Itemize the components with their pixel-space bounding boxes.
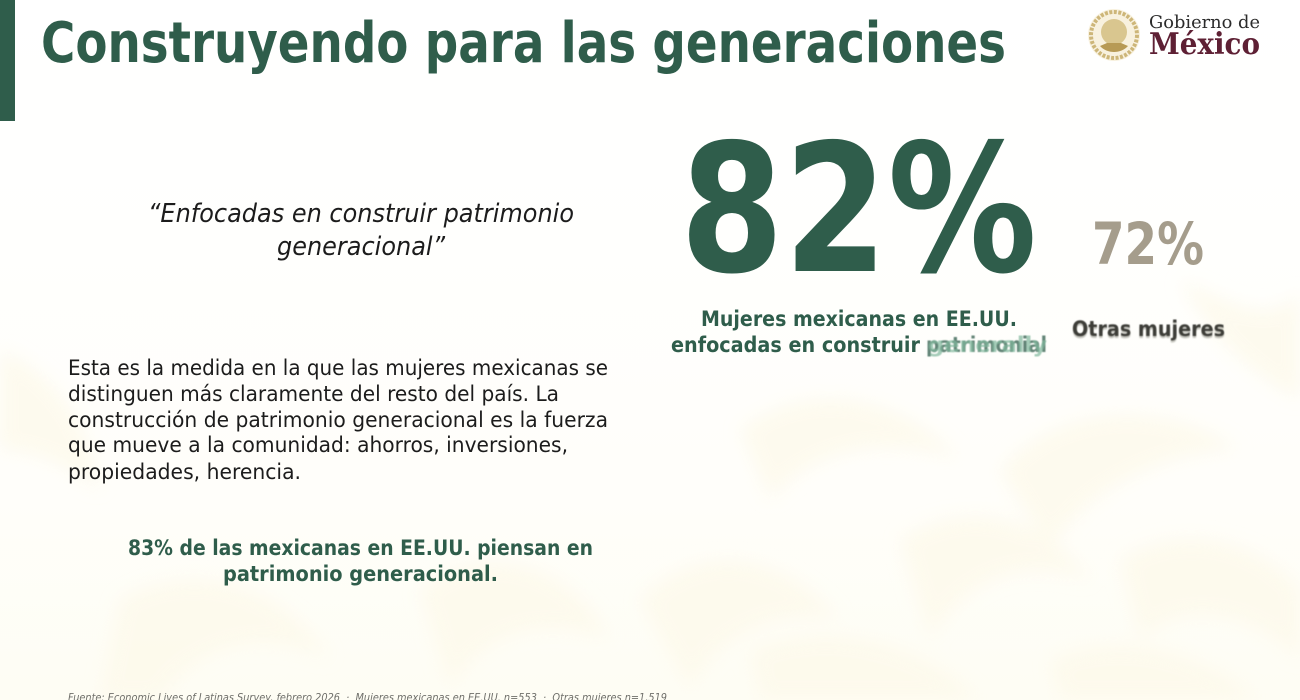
label: Mujeres mexicanas: Mujeres mexicanas en EE.UU. <box>701 307 1017 332</box>
body paragraph: Esta es la medida en la que las mujeres mexicanas se <box>68 356 608 381</box>
key finding callout: 83% de las mexicanas en EE.UU. piensan en <box>128 536 593 561</box>
label: Mujeres mexicanas <box>671 307 1047 358</box>
big stat: 82%: 82% <box>680 106 1037 313</box>
logo text: México: México <box>1149 27 1260 62</box>
quote heading <box>148 199 574 262</box>
quote heading: “Enfocadas en construir patrimonio <box>148 199 574 229</box>
quote heading: generacional” <box>277 232 445 262</box>
icon: national coat of arms seal <box>1088 9 1140 61</box>
garbled overlapping word: generally <box>928 333 1047 358</box>
body paragraph: que mueve a la comunidad: ahorros, inversiones, <box>68 433 568 458</box>
key finding callout <box>128 536 593 587</box>
key finding callout: patrimonio generacional. <box>223 562 498 587</box>
label: Mujeres mexicanas: enfocadas en construir <box>671 333 920 358</box>
body paragraph: propiedades, herencia. <box>68 460 301 485</box>
label: Otras mujeres: Otras mujeres <box>1072 317 1225 341</box>
comparison stat: 72%: 72% <box>1092 210 1204 278</box>
label: Otras mujeres: Otras mujeres <box>1072 319 1225 343</box>
logo: Gobierno de México <box>1088 9 1260 62</box>
body paragraph <box>68 356 608 485</box>
logo text: Gobierno de: Gobierno de <box>1149 12 1260 33</box>
garbled overlapping word: patrimonial <box>926 333 1047 358</box>
body paragraph: distinguen más claramente del resto del país. La <box>68 382 559 407</box>
accent bar <box>0 0 15 121</box>
title: Construyendo para las generaciones <box>41 11 1006 76</box>
body paragraph: construcción de patrimonio generacional es la fuerza <box>68 408 608 433</box>
